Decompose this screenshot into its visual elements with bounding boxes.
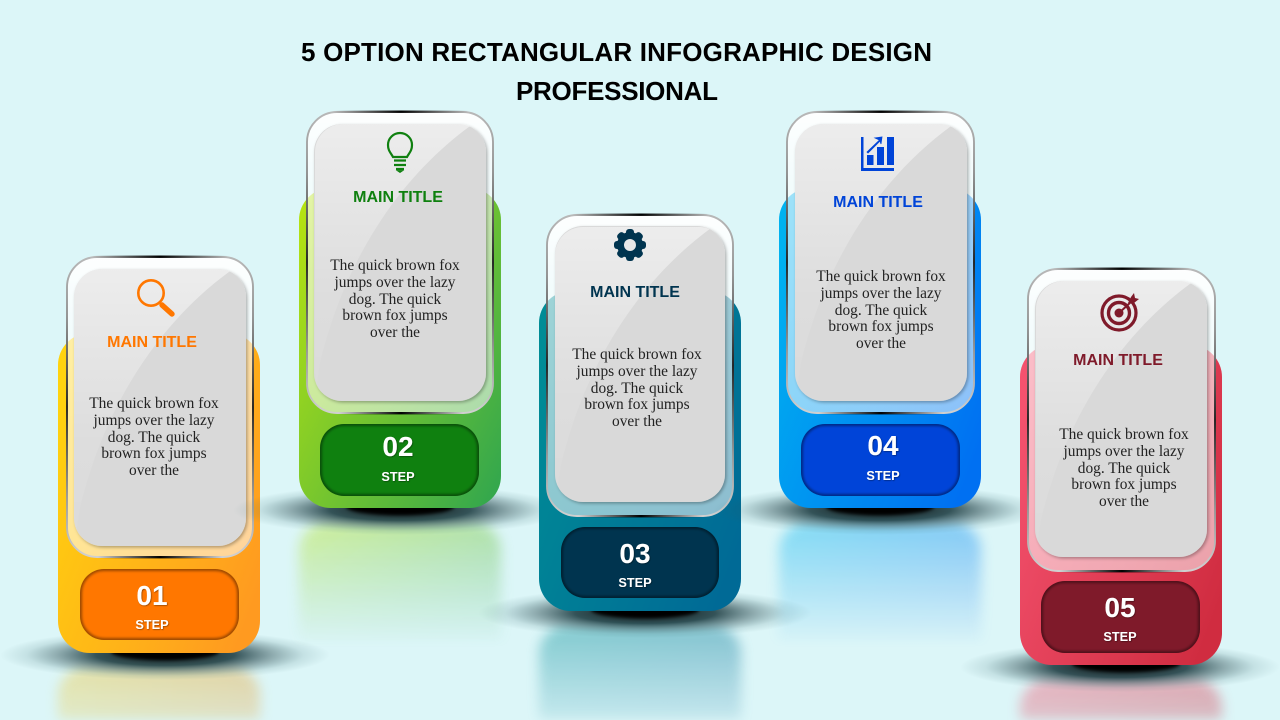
text block: over the bbox=[1099, 493, 1149, 510]
text block: The quick brown fox bbox=[330, 257, 460, 274]
title: 5 OPTION RECTANGULAR INFOGRAPHIC DESIGN bbox=[301, 37, 932, 67]
floor shadow bbox=[233, 485, 567, 535]
heading: MAIN TITLE bbox=[590, 284, 680, 301]
title: PROFESSIONAL bbox=[516, 76, 718, 106]
step badge: STEP bbox=[135, 618, 169, 632]
heading: MAIN TITLE bbox=[833, 194, 923, 211]
reflection bbox=[779, 523, 981, 648]
text block: jumps over the lazy bbox=[334, 274, 456, 291]
text block: jumps over the lazy bbox=[1063, 443, 1185, 460]
heading: MAIN TITLE bbox=[353, 189, 443, 206]
floor shadow bbox=[713, 485, 1047, 535]
step badge bbox=[80, 569, 239, 640]
text block: dog. The quick bbox=[591, 380, 684, 397]
step badge bbox=[320, 424, 479, 496]
text block: brown fox jumps bbox=[828, 318, 934, 335]
step badge: 05 bbox=[1104, 592, 1136, 623]
panel: step 03 bbox=[478, 214, 812, 720]
step badge: 01 bbox=[136, 580, 168, 611]
step badge: 03 bbox=[619, 538, 651, 569]
panel: step 05 bbox=[960, 268, 1280, 720]
text block: jumps over the lazy bbox=[93, 412, 215, 429]
reflection bbox=[539, 626, 741, 720]
text block: The quick brown fox bbox=[89, 395, 219, 412]
text block: brown fox jumps bbox=[1071, 476, 1177, 493]
text block: The quick brown fox bbox=[572, 346, 702, 363]
glass frame bbox=[307, 110, 493, 414]
text block: over the bbox=[856, 335, 906, 352]
step badge bbox=[561, 527, 719, 598]
base card bbox=[58, 333, 260, 653]
icon: bar chart bbox=[861, 137, 894, 171]
text block: over the bbox=[612, 413, 662, 430]
text block: over the bbox=[129, 462, 179, 479]
panel: step 04 bbox=[713, 110, 1047, 648]
text block: The quick brown fox bbox=[1059, 426, 1189, 443]
content card bbox=[795, 124, 967, 401]
text block: brown fox jumps bbox=[584, 396, 690, 413]
floor shadow bbox=[960, 642, 1280, 692]
title bbox=[301, 37, 932, 106]
icon: magnifier bbox=[138, 280, 172, 314]
glass frame bbox=[547, 214, 733, 517]
text block: The quick brown fox bbox=[816, 268, 946, 285]
icon: gear bbox=[614, 229, 646, 261]
icon: target bbox=[1102, 293, 1139, 330]
step badge: STEP bbox=[618, 576, 652, 590]
step badge bbox=[801, 424, 960, 496]
step badge: STEP bbox=[1103, 630, 1137, 644]
text block: brown fox jumps bbox=[101, 445, 207, 462]
text block: dog. The quick bbox=[349, 291, 442, 308]
text block bbox=[572, 346, 702, 430]
glass frame bbox=[787, 110, 974, 414]
text block bbox=[330, 257, 460, 341]
heading: MAIN TITLE bbox=[1073, 352, 1163, 369]
floor shadow bbox=[0, 630, 330, 680]
reflection bbox=[58, 668, 260, 720]
text block bbox=[1059, 426, 1189, 510]
text block bbox=[89, 395, 219, 479]
text block: dog. The quick bbox=[835, 302, 928, 319]
glass frame bbox=[67, 256, 253, 558]
icon: light bulb bbox=[388, 133, 412, 172]
reflection bbox=[299, 523, 501, 648]
glass frame bbox=[1028, 268, 1215, 572]
panel: step 01 bbox=[0, 256, 330, 720]
reflection bbox=[1020, 680, 1222, 720]
text block: jumps over the lazy bbox=[820, 285, 942, 302]
text block: over the bbox=[370, 324, 420, 341]
text block: brown fox jumps bbox=[342, 307, 448, 324]
base card bbox=[1020, 345, 1222, 665]
base card bbox=[779, 188, 981, 508]
panel: step 02 bbox=[233, 110, 567, 648]
floor shadow bbox=[478, 588, 812, 638]
content card bbox=[555, 226, 725, 502]
step badge: STEP bbox=[381, 470, 415, 484]
content card bbox=[1035, 281, 1207, 557]
base card bbox=[299, 188, 501, 508]
step badge bbox=[1041, 581, 1200, 653]
text block bbox=[816, 268, 946, 352]
text block: dog. The quick bbox=[1078, 460, 1171, 477]
text block: dog. The quick bbox=[108, 429, 201, 446]
heading: MAIN TITLE bbox=[107, 334, 197, 351]
content card bbox=[314, 124, 486, 401]
text block: jumps over the lazy bbox=[576, 363, 698, 380]
base card bbox=[539, 291, 741, 611]
step badge: 04 bbox=[867, 430, 899, 461]
content card bbox=[74, 269, 246, 546]
step badge: 02 bbox=[382, 431, 414, 462]
step badge: STEP bbox=[866, 469, 900, 483]
